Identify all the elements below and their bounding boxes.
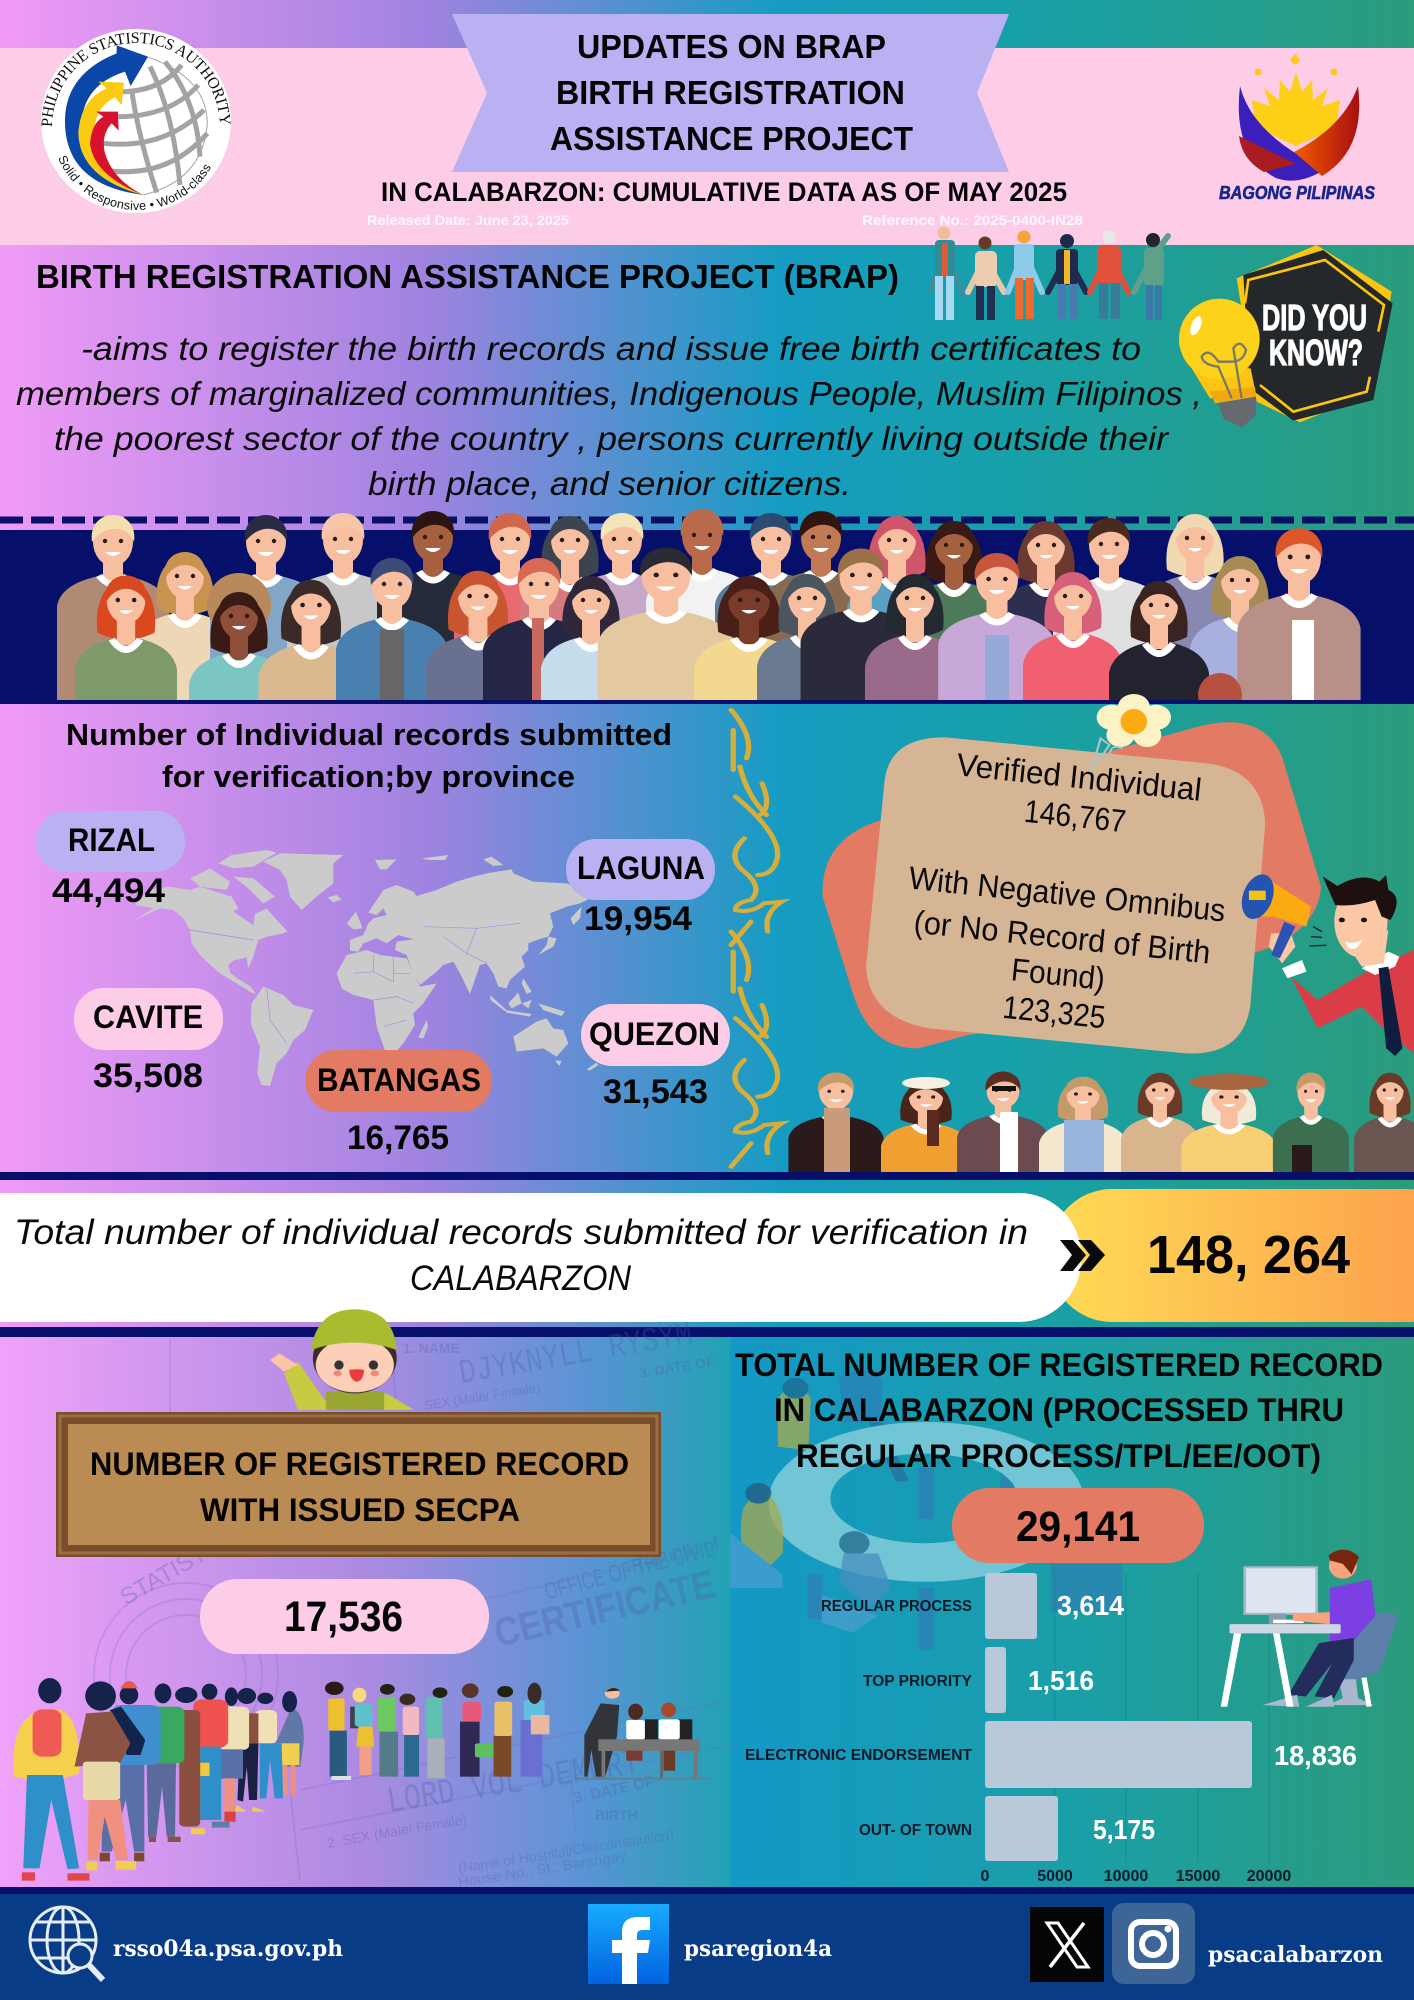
icon: X bbox=[1030, 1907, 1104, 1982]
crowd illustration bbox=[57, 509, 1361, 700]
cork board heading: WITH ISSUED SECPA bbox=[200, 1492, 520, 1528]
pill: Batangas: 16,765 bbox=[347, 1119, 449, 1157]
bar chart: registered records by process: ELECTRONIC ENDORSEMENT bbox=[745, 1747, 972, 1764]
faded birth certificate background: House No., St., Barangay bbox=[457, 1848, 627, 1890]
pill: Rizal bbox=[36, 811, 185, 910]
faded birth certificate background: 3. DATE OF bbox=[638, 1353, 716, 1381]
logo: Philippine Statistics Authority: Solid • Responsive • World-class bbox=[59, 156, 210, 210]
faded birth certificate background: 1. NAME bbox=[403, 1340, 460, 1356]
pill: Laguna: 19,954 bbox=[584, 900, 692, 938]
world map bbox=[132, 850, 598, 1086]
pill: Rizal: 44,494 bbox=[52, 872, 165, 910]
instagram handle: psacalabarzon bbox=[1208, 1942, 1383, 1968]
pill: Quezon: 31,543 bbox=[603, 1073, 708, 1111]
icon: globe with magnifier bbox=[30, 1907, 103, 1980]
value pill: 29,141: 29,141 bbox=[1016, 1503, 1140, 1551]
title ribbon bbox=[452, 14, 1009, 172]
faded birth certificate background: OFFICE OF THE CIVIL bbox=[542, 1535, 717, 1606]
faded birth certificate background: (Name of Hospital/Clinic/Institution) bbox=[457, 1826, 675, 1876]
title bbox=[550, 28, 913, 157]
title: ASSISTANCE PROJECT bbox=[550, 120, 913, 157]
bar chart: registered records by process: 3,614 bbox=[1057, 1590, 1124, 1621]
illustration: queue of people bbox=[13, 1678, 708, 1881]
bar chart: registered records by process bbox=[745, 1572, 1357, 1885]
faded meeting table illustration bbox=[730, 1370, 1123, 1650]
gold ornament divider bbox=[731, 710, 782, 1167]
callout: verified counts with coral blob: With Negative Omnibus bbox=[907, 860, 1227, 929]
bar chart: registered records by process: 5,175 bbox=[1093, 1814, 1155, 1845]
callout: verified counts with coral blob: (or No Record of Birth bbox=[912, 904, 1212, 971]
footer band bbox=[0, 1887, 1414, 2000]
bar chart: registered records by process: TOP PRIORITY bbox=[863, 1673, 972, 1690]
illustration: person at computer bbox=[1221, 1550, 1398, 1707]
logo: Philippine Statistics Authority: PHILIPPINE STATISTICS AUTHORITY bbox=[41, 32, 231, 127]
bar chart: registered records by process: 0 bbox=[981, 1868, 990, 1885]
bar chart: registered records by process: 10000 bbox=[1104, 1868, 1148, 1885]
value pill: 17,536 bbox=[200, 1579, 489, 1654]
illustration: six people holding hands bbox=[932, 226, 1168, 320]
faded birth certificate background: 2. SEX (Male/ Female) bbox=[326, 1811, 468, 1851]
callout: verified counts with coral blob bbox=[823, 694, 1321, 1054]
release date and reference number bbox=[367, 212, 1083, 228]
heading: total registered record: IN CALABARZON (PROCESSED THRU bbox=[774, 1392, 1344, 1428]
callout: verified counts with coral blob: Found) bbox=[1010, 951, 1107, 997]
logo: Bagong Pilipinas bbox=[1219, 53, 1376, 203]
icon: facebook bbox=[588, 1904, 669, 1984]
title: BIRTH REGISTRATION bbox=[556, 74, 905, 111]
dashed divider and navy band bbox=[0, 520, 1414, 704]
faded birth certificate background: STATISTIC bbox=[116, 1528, 232, 1611]
website link: rsso04a.psa.gov.ph bbox=[113, 1936, 343, 1962]
pill: Batangas bbox=[305, 1050, 492, 1157]
logo: Bagong Pilipinas: BAGONG PILIPINAS bbox=[1219, 182, 1376, 203]
faded birth certificate background: Republic of bbox=[629, 1533, 722, 1576]
release date and reference number: Released Date: June 23, 2025 bbox=[367, 212, 569, 228]
facebook handle: psaregion4a bbox=[684, 1936, 832, 1962]
release date and reference number: Reference No.: 2025-0400-IN28 bbox=[862, 212, 1083, 228]
faded birth certificate background: CERTIFICATE bbox=[490, 1562, 719, 1656]
heading: records by province bbox=[66, 717, 672, 794]
pill: Cavite: CAVITE bbox=[93, 999, 203, 1035]
faded birth certificate background: SEX (Male/ Female) bbox=[423, 1380, 541, 1413]
header band bbox=[0, 14, 1414, 245]
heading: total registered record bbox=[735, 1347, 1383, 1474]
illustration: waving boy bbox=[270, 1309, 414, 1410]
heading: total registered record: REGULAR PROCESS/TPL/EE/OOT) bbox=[796, 1438, 1321, 1474]
icon: instagram bbox=[1112, 1903, 1195, 1984]
heading: records by province: Number of Individual records submitted bbox=[66, 717, 672, 752]
faded birth certificate background: LORD VOL DEMORT bbox=[384, 1742, 643, 1823]
heading: records by province: for verification;by province bbox=[162, 759, 575, 794]
bar chart: registered records by process: 5000 bbox=[1037, 1868, 1073, 1885]
total records band bbox=[0, 1189, 1414, 1322]
cork board heading bbox=[56, 1412, 661, 1557]
description text: -aims to register the birth records and issue free birth certificates to bbox=[81, 330, 1141, 367]
description text bbox=[16, 330, 1202, 502]
title: UPDATES ON BRAP bbox=[577, 28, 886, 65]
faded birth certificate background: DJYKNYLL RYSYM bbox=[456, 1317, 695, 1394]
bar chart: registered records by process: 15000 bbox=[1176, 1868, 1220, 1885]
faded birth certificate background: 3. DATE OF bbox=[572, 1773, 655, 1807]
pill: Laguna: LAGUNA bbox=[577, 850, 705, 886]
bar chart: registered records by process: 1,516 bbox=[1028, 1665, 1094, 1696]
panel: registered records with SECPA bbox=[0, 1309, 730, 1890]
callout: verified counts with coral blob: Verified Individual bbox=[955, 746, 1203, 808]
pill: Quezon bbox=[581, 1004, 730, 1111]
callout: verified counts with coral blob: 146,767 bbox=[1023, 793, 1128, 839]
pill: Batangas: BATANGAS bbox=[317, 1062, 481, 1098]
bar chart: registered records by process: 18,836 bbox=[1274, 1740, 1357, 1771]
total records band: 148, 264 bbox=[1147, 1225, 1350, 1285]
illustration: row of eight people bbox=[788, 1072, 1414, 1172]
callout: verified counts with coral blob: 123,325 bbox=[1001, 989, 1107, 1035]
pill: Cavite bbox=[74, 988, 223, 1095]
did you know badge: DID YOU bbox=[1262, 297, 1367, 338]
faded birth certificate background bbox=[94, 1317, 730, 1890]
pill: Laguna bbox=[566, 839, 715, 938]
bar chart: registered records by process: OUT- OF TOWN bbox=[859, 1822, 972, 1839]
cork board heading: NUMBER OF REGISTERED RECORD bbox=[90, 1446, 629, 1482]
total records band: CALABARZON bbox=[410, 1259, 632, 1298]
value pill: 17,536: 17,536 bbox=[284, 1593, 403, 1641]
panel: total registered records bbox=[730, 1337, 1414, 1887]
pill: Cavite: 35,508 bbox=[93, 1057, 203, 1095]
logo: Philippine Statistics Authority bbox=[41, 29, 231, 213]
navy divider below total band bbox=[0, 1327, 1414, 1337]
navy divider above total band bbox=[0, 1172, 1414, 1180]
subtitle: IN CALABARZON: CUMULATIVE DATA AS OF MAY 2025 bbox=[381, 177, 1067, 207]
pill: Quezon: QUEZON bbox=[589, 1016, 720, 1052]
bar chart: registered records by process: REGULAR PROCESS bbox=[821, 1598, 972, 1615]
description text: the poorest sector of the country , persons currently living outside their bbox=[54, 420, 1170, 457]
did you know badge: KNOW? bbox=[1269, 332, 1363, 373]
value pill: 29,141 bbox=[952, 1488, 1204, 1563]
illustration: man with megaphone bbox=[1237, 872, 1414, 1056]
bar chart: registered records by process: 20000 bbox=[1247, 1868, 1291, 1885]
total records band: Total number of individual records submitted for verification in bbox=[14, 1213, 1028, 1252]
heading: total registered record: TOTAL NUMBER OF REGISTERED RECORD bbox=[735, 1347, 1383, 1383]
heading: BRAP: BIRTH REGISTRATION ASSISTANCE PROJECT (BRAP) bbox=[36, 258, 899, 295]
faded birth certificate background: BIRTH bbox=[595, 1807, 638, 1823]
did you know badge bbox=[1179, 245, 1393, 428]
description text: birth place, and senior citizens. bbox=[368, 465, 851, 502]
pill: Rizal: RIZAL bbox=[68, 822, 155, 858]
description text: members of marginalized communities, Indigenous People, Muslim Filipinos , bbox=[16, 375, 1202, 412]
